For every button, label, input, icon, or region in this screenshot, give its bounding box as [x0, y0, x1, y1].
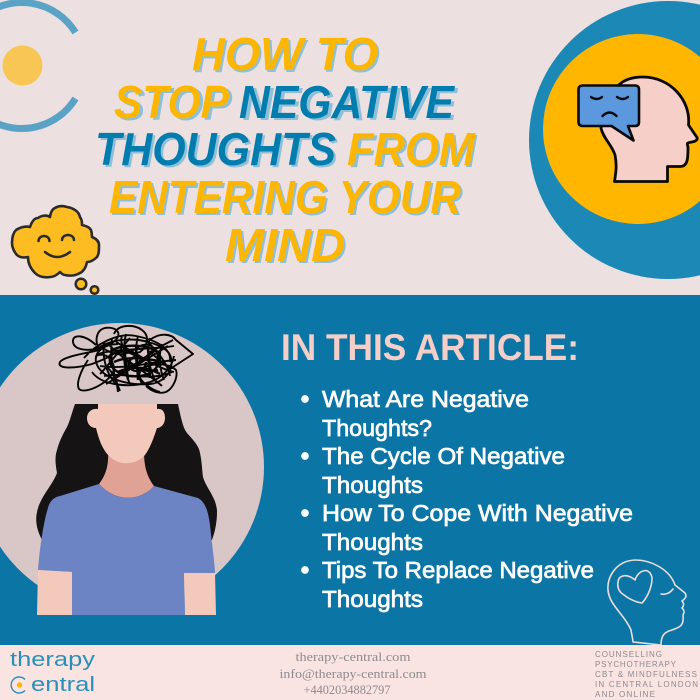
face	[87, 404, 165, 463]
title shadow layer: THOUGHTS FROM	[98, 125, 478, 177]
services list: CBT & MINDFULNESS	[595, 670, 697, 679]
logo: therapy central: entral	[31, 674, 95, 696]
decorative logo ring with dot	[0, 3, 76, 129]
services list: PSYCHOTHERAPY	[595, 660, 677, 669]
title colored layer: NEGATIVE	[239, 76, 455, 128]
services list: COUNSELLING	[595, 650, 662, 659]
icon: sad thought head in circles	[529, 1, 700, 279]
heading: in this article: IN THIS ARTICLE:	[281, 327, 579, 368]
title colored layer: HOW TO	[192, 28, 378, 80]
article bullet list: How To Cope With Negative	[322, 500, 633, 526]
right arm	[184, 573, 216, 615]
contact details: +4402034882797	[304, 682, 391, 697]
backdrop circle	[0, 323, 264, 611]
title colored layer: MIND	[225, 219, 345, 271]
footer bar	[0, 645, 700, 700]
logo: therapy central: therapy	[10, 649, 95, 671]
bottom blue panel	[0, 295, 700, 645]
title colored layer	[95, 28, 477, 271]
neck	[99, 450, 154, 498]
article bullet list: Thoughts?	[322, 415, 432, 441]
title colored layer: FROM	[347, 123, 477, 175]
services list: AND ONLINE	[595, 690, 655, 699]
article bullet list	[302, 386, 633, 612]
title colored layer: STOP	[114, 76, 229, 128]
article bullet list: Thoughts	[322, 586, 423, 612]
article bullet list: Thoughts	[322, 529, 423, 555]
services list	[595, 650, 698, 699]
title shadow layer: HOW TO	[194, 30, 380, 82]
title shadow layer	[98, 30, 478, 273]
top panel background	[0, 0, 700, 295]
article bullet list: Thoughts	[322, 472, 423, 498]
contact details: info@therapy-central.com	[280, 666, 426, 681]
article bullet list: Tips To Replace Negative	[322, 557, 594, 583]
head silhouette	[601, 77, 697, 182]
article bullet list: What Are Negative	[322, 386, 529, 412]
icon: smiling thought cloud	[12, 206, 99, 294]
title shadow layer: STOP NEGATIVE	[117, 78, 458, 130]
hair	[36, 404, 217, 540]
contact details: therapy-central.com	[296, 649, 410, 664]
left arm	[37, 570, 72, 615]
shirt	[38, 484, 215, 615]
contact details	[280, 649, 426, 697]
services list: IN CENTRAL LONDON	[595, 680, 698, 689]
scribble	[60, 326, 193, 393]
title	[95, 28, 478, 273]
logo: therapy central	[10, 649, 95, 696]
speech bubble with sad face	[578, 86, 639, 140]
title shadow layer: MIND	[227, 221, 347, 273]
title shadow layer: ENTERING YOUR	[111, 173, 463, 225]
title colored layer: THOUGHTS	[95, 123, 336, 175]
illustration: woman with tangled thoughts	[0, 323, 264, 615]
title colored layer: ENTERING YOUR	[109, 171, 461, 223]
article bullet list: The Cycle Of Negative	[322, 443, 565, 469]
icon: head outline with heart	[608, 560, 686, 645]
